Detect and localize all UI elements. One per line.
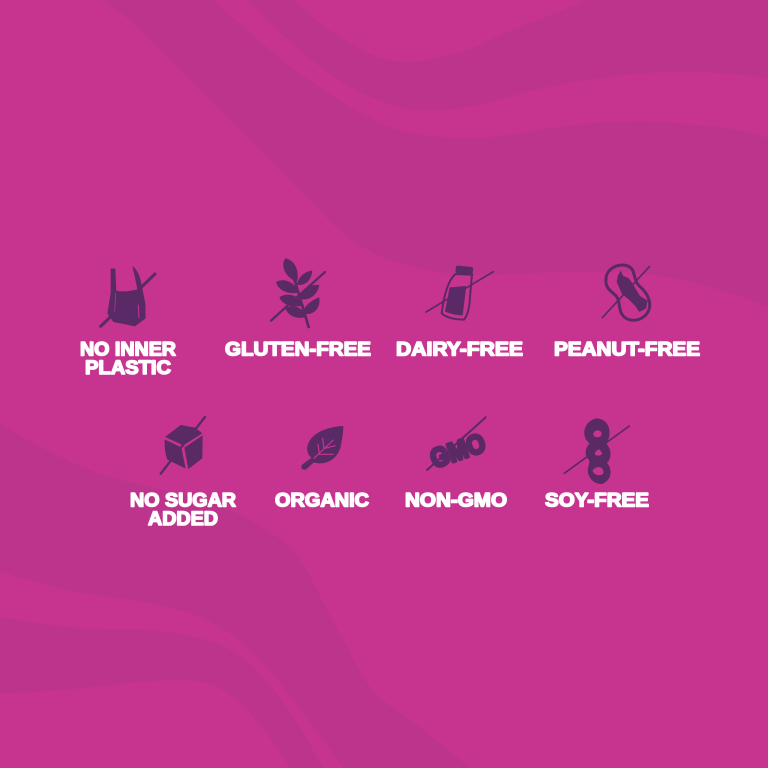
icon: crossed milk bottle bbox=[426, 265, 493, 320]
label: no inner plastic: PLASTIC bbox=[85, 358, 171, 379]
item: organic bbox=[275, 426, 369, 512]
item: non-gmo bbox=[405, 417, 507, 512]
icon: crossed wheat bbox=[271, 258, 325, 327]
background wave: bottom inner band bbox=[0, 617, 323, 768]
label: organic: ORGANIC bbox=[275, 490, 369, 512]
label: no sugar added bbox=[130, 490, 236, 530]
label: no sugar added: ADDED bbox=[148, 509, 218, 530]
icon: crossed sugar cube bbox=[161, 417, 205, 474]
label: peanut-free: PEANUT-FREE bbox=[554, 340, 700, 360]
label: no sugar added: NO SUGAR bbox=[130, 490, 236, 512]
label: dairy-free: DAIRY-FREE bbox=[396, 340, 523, 360]
background wave: top inner band bbox=[247, 0, 768, 110]
item: no inner plastic bbox=[80, 266, 176, 379]
item: peanut-free bbox=[554, 265, 700, 360]
background wave: bottom outer band bbox=[0, 423, 470, 768]
label: no inner plastic: NO INNER bbox=[80, 340, 176, 360]
item: no sugar added bbox=[130, 417, 236, 530]
icon: crossed plastic bag bbox=[101, 266, 155, 326]
item: dairy-free bbox=[396, 265, 523, 360]
item: soy-free bbox=[545, 418, 649, 512]
label: soy-free: SOY-FREE bbox=[545, 490, 649, 512]
icon: crossed peanut bbox=[602, 265, 650, 320]
icon: crossed GMO: GMO bbox=[426, 427, 489, 474]
label: non-gmo: NON-GMO bbox=[405, 490, 507, 512]
icon: leaf bbox=[301, 426, 343, 470]
item: gluten-free bbox=[225, 258, 371, 360]
icon: crossed soybean bbox=[564, 418, 629, 484]
label: gluten-free: GLUTEN-FREE bbox=[225, 340, 371, 360]
background wave: top outer band bbox=[104, 0, 768, 307]
label: no inner plastic bbox=[80, 340, 176, 379]
